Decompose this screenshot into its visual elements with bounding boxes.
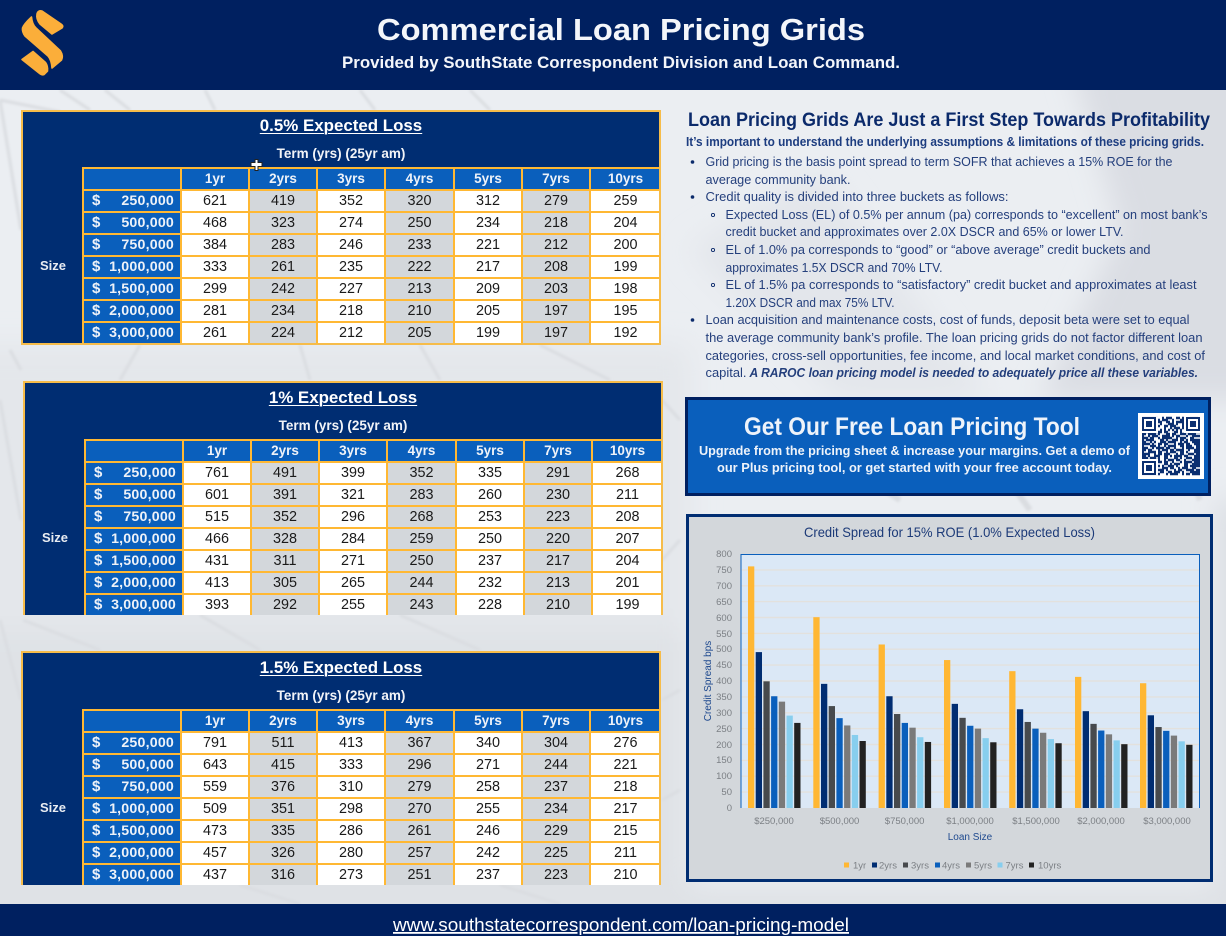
bullet list: the average community bank’s profile. The loan pricing grids do not factor different loan [706,330,1202,345]
pricing table: 468 [203,215,227,231]
pricing table: 321 [341,487,365,503]
pricing table: 310 [339,779,363,795]
pricing table: 207 [615,531,640,547]
pricing table: 3yrs [337,713,365,728]
bullet list: Credit quality is divided into three buckets as follows: [706,189,1008,204]
pricing table: 210 [407,303,432,319]
pricing table: 466 [205,531,229,547]
pricing table: 213 [407,281,432,297]
pricing table: 259 [613,193,638,209]
pricing table: 3,000,000 [109,325,174,341]
y axis labels: 650 [716,597,732,608]
y axis labels: 400 [716,676,732,687]
callout text: our Plus pricing tool, or get started with your free account today. [716,460,1112,474]
pricing table: 217 [546,553,570,569]
callout text: Get Our Free Loan Pricing Tool [744,412,1080,440]
pricing table: $ [94,508,102,525]
pricing table: 601 [205,487,229,503]
pricing table: 253 [478,509,502,525]
footer band [0,904,1226,936]
bullet list: EL of 1.5% pa corresponds to “satisfactory” credit bucket and approximates at least [726,277,1197,292]
pricing table: 220 [546,531,570,547]
pricing table: 237 [476,867,500,883]
pricing table: 222 [407,259,432,275]
pricing table: 320 [407,193,432,209]
pricing table: 391 [273,487,297,503]
pricing table: 500,000 [121,215,174,231]
pricing table: 260 [478,487,502,503]
pricing table: 250,000 [123,465,176,481]
pricing table: 1yr [205,171,225,186]
pricing table: 750,000 [123,509,176,525]
y axis labels: 750 [716,565,732,576]
pricing table: 204 [613,215,638,231]
pricing table: 224 [271,325,295,341]
pricing table: 1yr [205,713,225,728]
pricing table: 237 [544,779,568,795]
pricing table: 621 [203,193,227,209]
bullet list: Loan acquisition and maintenance costs, cost of funds, deposit beta were set to equal [706,312,1190,327]
pricing table: 419 [271,193,295,209]
pricing table: 197 [544,303,568,319]
legend: 10yrs [1038,860,1061,872]
pricing table: 268 [409,509,434,525]
legend [844,860,1061,872]
pricing table: 7yrs [542,713,570,728]
pricing table: 333 [203,259,227,275]
pricing table: 296 [407,757,432,773]
pricing table: 328 [273,531,297,547]
pricing table: 292 [273,597,297,613]
pricing table: 323 [271,215,295,231]
bars: loan size groups [748,566,1192,808]
pricing table: 1yr [207,443,227,458]
pricing table: 7yrs [542,171,570,186]
size label: Size [42,530,68,545]
pricing table: 393 [205,597,229,613]
pricing table: $ [94,596,102,613]
bullet list: EL of 1.0% pa corresponds to “good” or “above average” credit buckets and [726,242,1150,257]
pricing table: 312 [476,193,500,209]
pricing table: 2yrs [269,713,297,728]
pricing table: 227 [339,281,363,297]
pricing table: 2,000,000 [111,575,176,591]
pricing table: 7yrs [544,443,572,458]
pricing table: 203 [544,281,568,297]
pricing table: 500,000 [123,487,176,503]
pricing table: 750,000 [121,237,174,253]
pricing table: $ [92,258,100,275]
x axis labels: $250,000 [754,816,794,827]
legend: 4yrs [942,860,960,872]
pricing table: $ [94,486,102,503]
pricing table: 232 [478,575,502,591]
y axis labels: 350 [716,692,732,703]
pricing table: 250,000 [121,193,174,209]
pricing table: 3yrs [337,171,365,186]
pricing table: 10yrs [610,443,645,458]
pricing table: 192 [613,325,638,341]
pricing table: 5yrs [474,713,502,728]
pricing table: 210 [613,867,638,883]
pricing table: 296 [341,509,365,525]
pricing table: 274 [339,215,363,231]
header band [0,0,1226,90]
pricing table: 242 [271,281,295,297]
pricing table: 258 [476,779,500,795]
pricing table: 431 [205,553,229,569]
x axis labels: $2,000,000 [1077,816,1125,827]
pricing table: 3,000,000 [111,597,176,613]
pricing table: 199 [613,259,638,275]
callout text [698,412,1130,474]
pricing table: 201 [615,575,640,591]
bullet list: credit bucket and approximates over 2.0X DSCR and 65% or lower LTV. [726,224,1124,239]
pricing table: 205 [476,303,500,319]
pricing table: 2,000,000 [109,303,174,319]
pricing table: $ [92,214,100,231]
pricing table: $ [92,844,100,861]
pricing table: 281 [203,303,227,319]
y axis labels: 200 [716,740,732,751]
pricing table: 218 [544,215,568,231]
pricing table: $ [92,236,100,253]
pricing table: 1,000,000 [109,801,174,817]
bullet list: Grid pricing is the basis point spread to term SOFR that achieves a 15% ROE for the [706,154,1172,169]
pricing table: 413 [205,575,229,591]
term label: Term (yrs) (25yr am) [279,418,407,433]
footer link: www.southstatecorrespondent.com/loan-pricing-model [392,915,849,935]
pricing table: 1,500,000 [109,281,174,297]
x axis labels [754,816,1191,827]
x axis labels: $1,500,000 [1012,816,1060,827]
pricing table: 208 [544,259,568,275]
bullet list: Expected Loss (EL) of 0.5% per annum (pa) corresponds to “excellent” on most bank’s [726,207,1208,222]
pricing table: 251 [407,867,432,883]
pricing table: 255 [341,597,365,613]
pricing table: 208 [615,509,640,525]
pricing table: 511 [272,735,294,751]
pricing table: 367 [407,735,432,751]
pricing table: 5yrs [474,171,502,186]
pricing table: 2yrs [271,443,299,458]
bullet list: categories, cross-sell opportunities, fee income, and local market conditions, and cost of [706,348,1205,363]
pricing table: 559 [203,779,227,795]
pricing table: 284 [341,531,365,547]
pricing table: 271 [476,757,500,773]
pricing table: 244 [409,575,434,591]
pricing table: 283 [271,237,295,253]
pricing table [82,167,659,343]
pricing table: 199 [476,325,500,341]
pricing table: 311 [274,553,296,569]
pricing table: 265 [341,575,365,591]
pricing table: 1,500,000 [111,553,176,569]
subtitle: Provided by SouthState Correspondent Division and Loan Command. [342,54,900,72]
y axis labels: 150 [716,755,732,766]
pricing table: 335 [478,465,502,481]
legend: 1yr [853,860,866,872]
pricing table: 243 [409,597,434,613]
pricing table: 211 [614,845,637,861]
icon: cursor cross [250,159,262,171]
pricing table: 351 [271,801,295,817]
pricing table: $ [94,552,102,569]
pricing table: 225 [544,845,568,861]
pricing table: 3yrs [339,443,367,458]
y axis labels: 600 [716,613,732,624]
pricing table: 298 [339,801,363,817]
pricing table: $ [92,756,100,773]
title: Commercial Loan Pricing Grids [377,12,865,47]
pricing table: 415 [271,757,295,773]
pricing table [82,709,659,885]
x axis title: Loan Size [948,832,993,843]
pricing table: 246 [476,823,500,839]
term label: Term (yrs) (25yr am) [277,688,405,703]
pricing table: 223 [546,509,570,525]
pricing table: 1,500,000 [109,823,174,839]
pricing table: 5yrs [476,443,504,458]
pricing table: 261 [203,325,227,341]
pricing table: 213 [546,575,570,591]
pricing table: 3,000,000 [109,867,174,883]
pricing table: 1,000,000 [111,531,176,547]
panel: 1% expected loss grid [23,381,663,615]
pricing table: 200 [613,237,638,253]
pricing table: 473 [203,823,227,839]
pricing table: 291 [546,465,570,481]
pricing table: 215 [613,823,638,839]
term label: Term (yrs) (25yr am) [277,146,405,161]
pricing table: 4yrs [406,713,433,728]
panel: 0.5% expected loss grid [21,110,661,345]
pricing table: 259 [409,531,434,547]
pricing table: 2yrs [269,171,297,186]
x axis labels: $750,000 [885,816,924,827]
pricing table: 237 [478,553,502,569]
y axis labels: 0 [727,803,732,814]
pricing table: 244 [544,757,568,773]
pricing table: 218 [613,779,638,795]
callout: free loan pricing tool [685,397,1211,496]
pricing table: $ [92,866,100,883]
pricing table: 199 [615,597,640,613]
y axis title: Credit Spread bps [703,641,714,721]
pricing table [84,439,661,615]
y axis labels: 550 [716,629,732,640]
pricing table: 230 [546,487,570,503]
pricing table: 340 [476,735,500,751]
pricing table: 279 [544,193,568,209]
legend: 7yrs [1006,860,1024,872]
panel: bar chart of credit spread [686,514,1213,882]
pricing table: 217 [476,259,500,275]
bullet list [691,154,1208,380]
y axis labels: 500 [716,644,732,655]
pricing table: 268 [615,465,640,481]
pricing table: $ [92,734,100,751]
pricing table: 376 [271,779,295,795]
pricing table: 261 [271,259,295,275]
pricing table: 326 [271,845,295,861]
pricing table: 235 [339,259,363,275]
pricing table: $ [92,302,100,319]
pricing table: 273 [339,867,363,883]
pricing table: 413 [339,735,363,751]
text block: assumptions and limitations [686,109,1210,380]
pricing table: 384 [203,237,227,253]
icon: QR code [1138,413,1204,479]
pricing table: 257 [407,845,432,861]
y axis labels: 300 [716,708,732,719]
pricing table: 228 [478,597,502,613]
pricing table: 286 [339,823,363,839]
pricing table: 255 [476,801,500,817]
pricing table: 233 [407,237,432,253]
pricing table: 221 [476,237,500,253]
pricing table: 197 [544,325,568,341]
pricing table: 399 [341,465,365,481]
panel heading: 0.5% Expected Loss [260,116,422,135]
pricing table: $ [92,800,100,817]
panel: 1.5% expected loss grid [21,651,661,885]
pricing table: 304 [544,735,568,751]
pricing table: 305 [273,575,297,591]
pricing table: 211 [616,487,639,503]
pricing table: 791 [203,735,227,751]
panel heading: 1% Expected Loss [269,388,417,407]
pricing table: 261 [407,823,432,839]
pricing table: 750,000 [121,779,174,795]
pricing table: 515 [205,509,229,525]
bullet list: capital. [706,365,746,380]
x axis labels: $3,000,000 [1143,816,1191,827]
chart title: Credit Spread for 15% ROE (1.0% Expected Loss) [804,524,1095,540]
pricing table: 223 [544,867,568,883]
icon: SouthState logo [21,10,64,76]
pricing table: 352 [273,509,297,525]
pricing table: $ [92,324,100,341]
pricing table: 250 [407,215,432,231]
pricing table: 1,000,000 [109,259,174,275]
pricing table: 10yrs [608,171,643,186]
pricing table: 209 [476,281,500,297]
pricing table: 491 [273,465,297,481]
y axis labels: 50 [721,787,732,798]
y axis labels: 250 [716,724,732,735]
pricing table: 283 [409,487,434,503]
y axis labels: 450 [716,660,732,671]
pricing table: 234 [271,303,295,319]
pricing table: 352 [409,465,434,481]
pricing table: 4yrs [406,171,433,186]
pricing table: 352 [339,193,363,209]
pricing table: $ [92,778,100,795]
pricing table: 242 [476,845,500,861]
pricing table: 437 [203,867,227,883]
pricing table: 335 [271,823,295,839]
pricing table: 204 [615,553,640,569]
y axis labels: 700 [716,581,732,592]
pricing table: 210 [546,597,570,613]
pricing table: 333 [339,757,363,773]
pricing table: 279 [407,779,432,795]
pricing table: 234 [476,215,500,231]
pricing table: 229 [544,823,568,839]
pricing table: 212 [544,237,568,253]
pricing table: 280 [339,845,363,861]
legend: 3yrs [911,860,929,872]
pricing table: 761 [205,465,229,481]
y axis labels [716,549,732,814]
pricing table: 4yrs [408,443,435,458]
x axis labels: $500,000 [820,816,859,827]
legend: 5yrs [974,860,992,872]
pricing table: 234 [544,801,568,817]
bullet list: average community bank. [706,172,850,187]
bullet list: approximates 1.5X DSCR and 70% LTV. [726,260,942,275]
pricing table: 205 [407,325,432,341]
pricing table: 246 [339,237,363,253]
pricing table: 217 [613,801,638,817]
callout text: Upgrade from the pricing sheet & increase your margins. Get a demo of [698,442,1130,458]
pricing table: 10yrs [608,713,643,728]
y axis labels: 100 [716,771,732,782]
pricing table: $ [94,530,102,547]
pricing table: 509 [203,801,227,817]
pricing table: 316 [271,867,295,883]
panel heading: 1.5% Expected Loss [260,658,422,677]
y axis labels: 800 [716,549,732,560]
pricing table: 457 [203,845,227,861]
pricing table: 299 [203,281,227,297]
pricing table: 195 [613,303,638,319]
pricing table: 212 [339,325,363,341]
pricing table: $ [92,280,100,297]
pricing table: 2,000,000 [109,845,174,861]
bullet list: 1.20X DSCR and max 75% LTV. [726,295,894,310]
pricing table: $ [94,574,102,591]
pricing table: $ [92,822,100,839]
pricing table: 250 [409,553,434,569]
plot area [741,554,1200,808]
pricing table: 270 [407,801,432,817]
size label: Size [40,258,66,273]
pricing table: 500,000 [121,757,174,773]
x axis labels: $1,000,000 [946,816,994,827]
pricing table: 276 [613,735,638,751]
pricing table: $ [92,192,100,209]
pricing table: 250 [478,531,502,547]
pricing table: 218 [339,303,363,319]
pricing table: 250,000 [121,735,174,751]
pricing table: 221 [613,757,638,773]
pricing table: $ [94,464,102,481]
pricing table: 271 [341,553,365,569]
legend: 2yrs [879,860,897,872]
size label: Size [40,800,66,815]
pricing table: 643 [203,757,227,773]
pricing table: 198 [613,281,638,297]
